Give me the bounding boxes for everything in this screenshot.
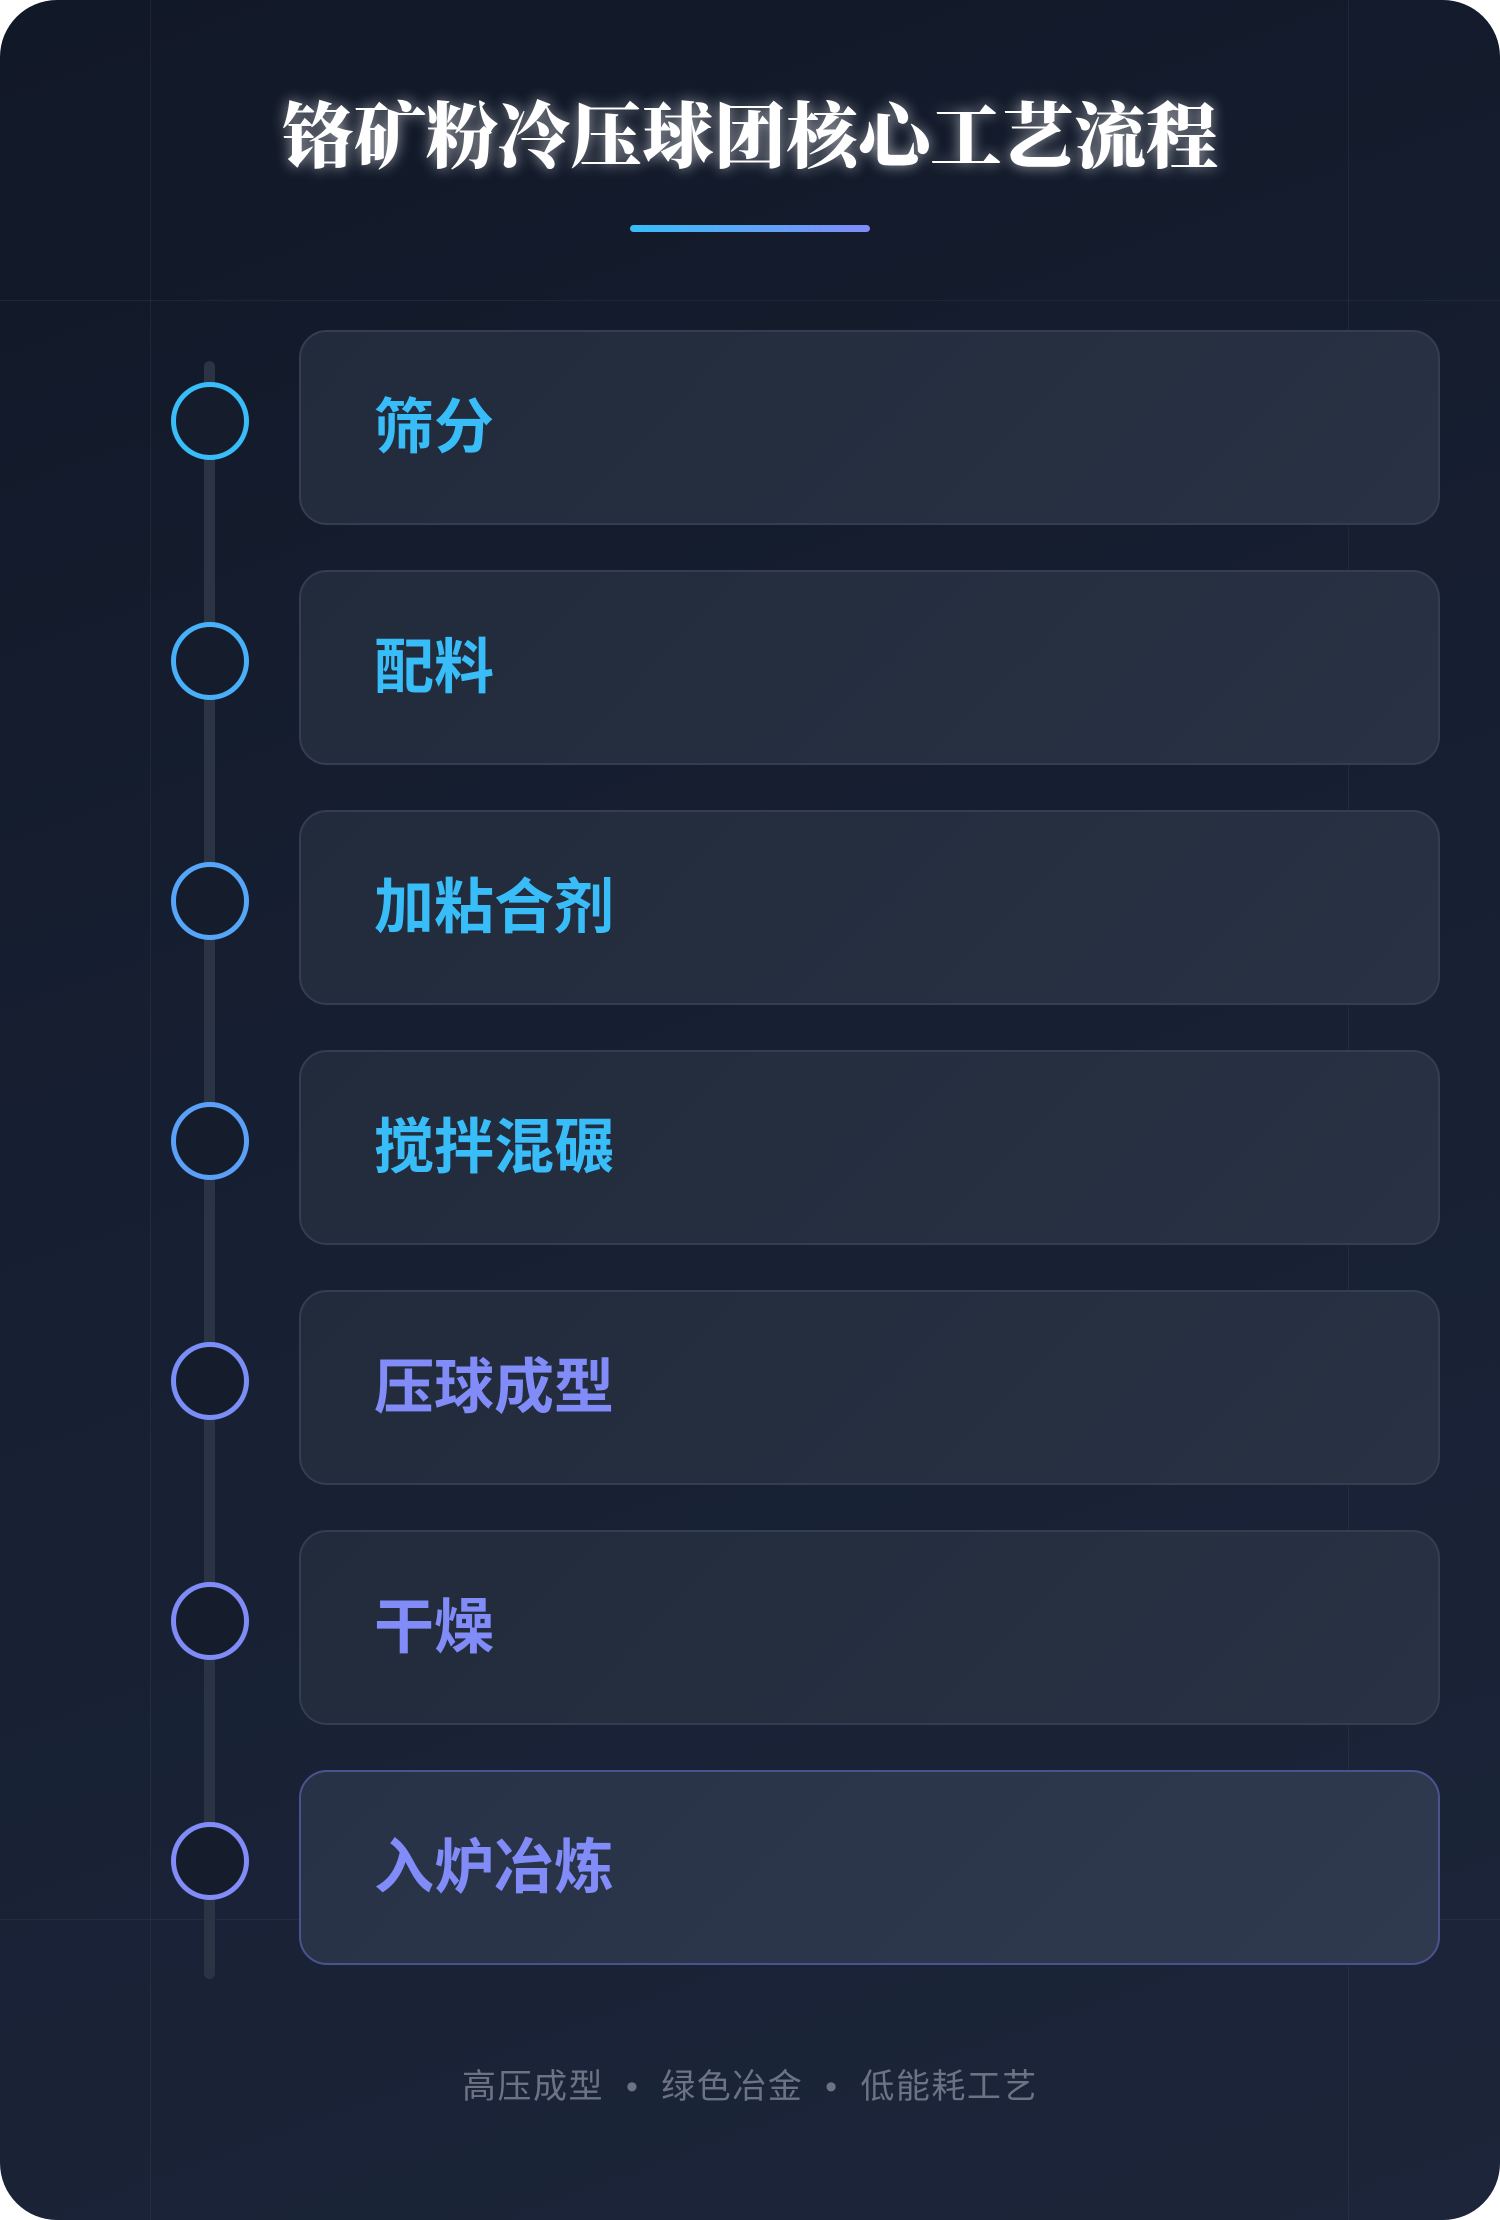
title: 铬矿粉冷压球团核心工艺流程 <box>282 98 1218 178</box>
step 4 node <box>171 1102 249 1180</box>
step 4 card: 搅拌混碾 <box>374 1114 614 1181</box>
step 3 card: 加粘合剂 <box>374 874 614 941</box>
title underline <box>630 225 870 232</box>
footer tagline: 高压成型 • 绿色冶金 • 低能耗工艺 <box>462 2068 1038 2106</box>
step 2 node <box>171 622 249 700</box>
step 1 card <box>299 330 1440 525</box>
step 7 card (highlighted): 入炉冶炼 <box>374 1834 614 1901</box>
step 2 card: 配料 <box>374 634 494 701</box>
step 5 card: 压球成型 <box>374 1354 614 1421</box>
step 7 card (highlighted) <box>299 1770 1440 1965</box>
step 6 node <box>171 1582 249 1660</box>
step 2 card <box>299 570 1440 765</box>
step 5 card <box>299 1290 1440 1485</box>
step 6 card <box>299 1530 1440 1725</box>
step 7 node <box>171 1822 249 1900</box>
step 5 node <box>171 1342 249 1420</box>
step 6 card: 干燥 <box>374 1594 494 1661</box>
timeline track <box>204 361 215 1979</box>
step 1 node <box>171 382 249 460</box>
step 1 card: 筛分 <box>374 394 494 461</box>
step 4 card <box>299 1050 1440 1245</box>
step 3 card <box>299 810 1440 1005</box>
step 3 node <box>171 862 249 940</box>
